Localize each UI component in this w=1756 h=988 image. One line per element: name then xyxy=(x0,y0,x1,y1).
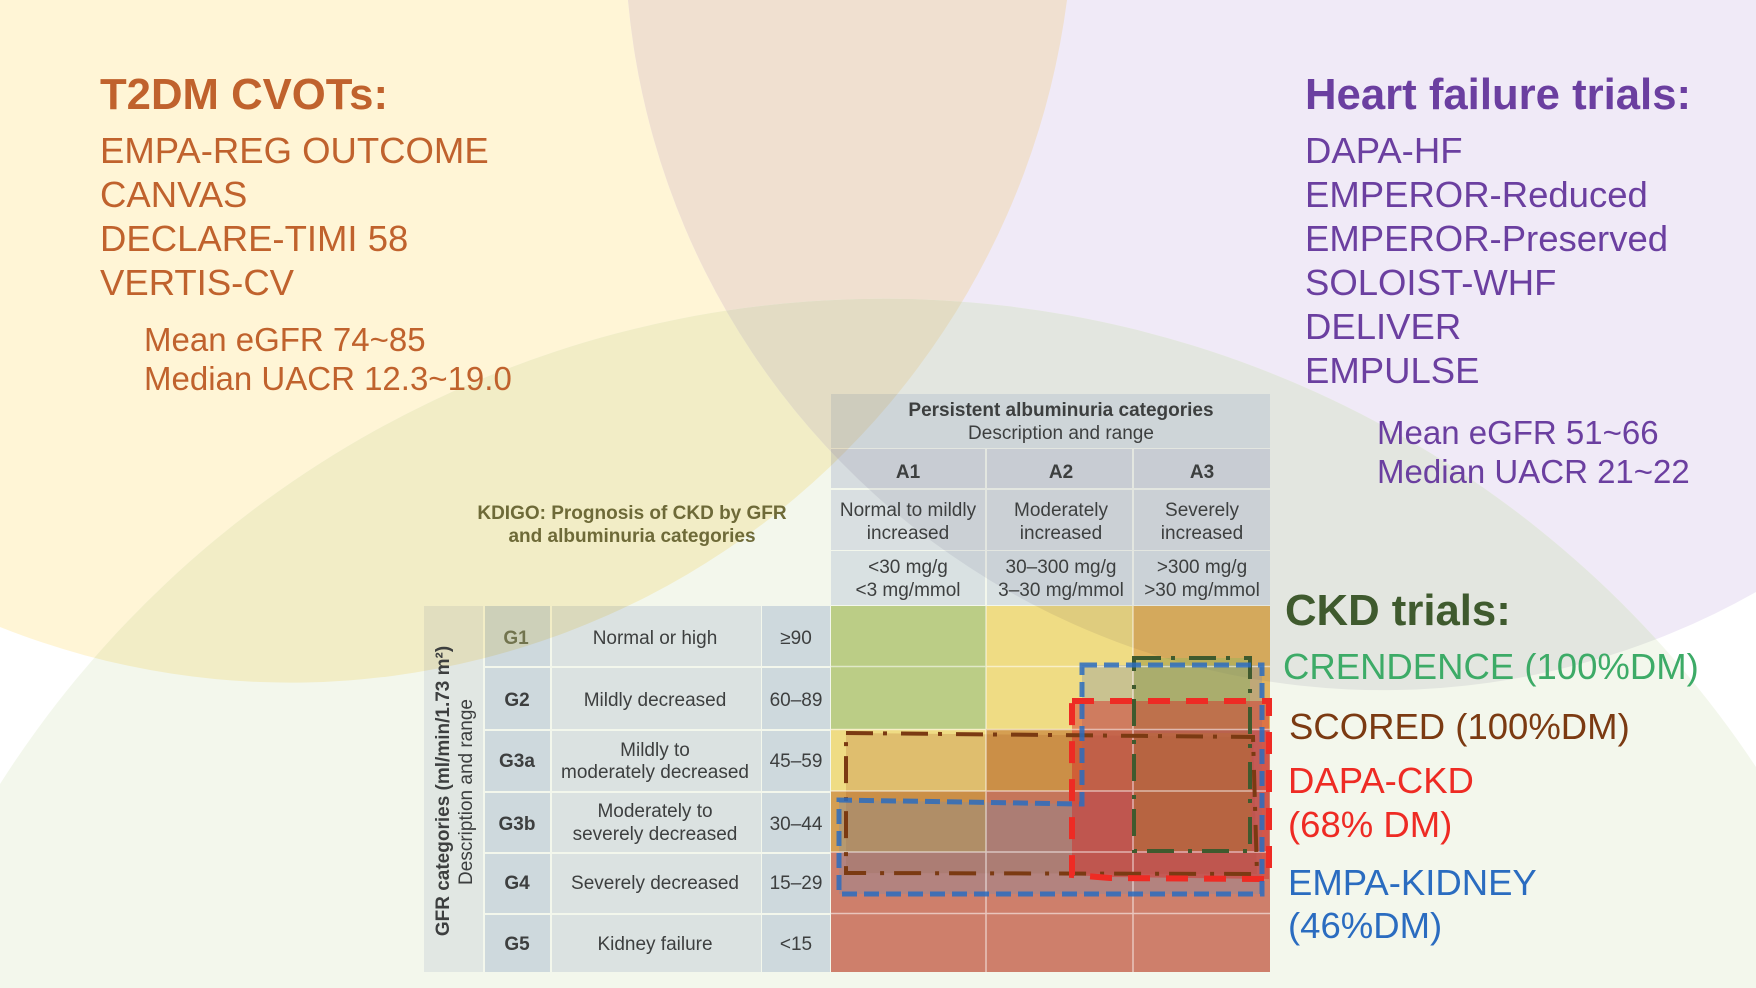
trial list: T2DM: CANVAS xyxy=(100,174,247,215)
trial list: T2DM: VERTIS-CV xyxy=(100,262,295,303)
table text: GFR rows: Kidney failure xyxy=(597,934,713,955)
table text: GFR rows: 30–44 xyxy=(770,814,823,835)
table text: albuminuria header: >300 mg/g xyxy=(1157,557,1247,578)
table text: GFR rows: severely decreased xyxy=(573,824,737,845)
trial list: T2DM xyxy=(100,130,489,303)
table text: GFR rows: 60–89 xyxy=(770,690,822,711)
table text: albuminuria header xyxy=(840,400,1260,601)
table text: albuminuria header: 3–30 mg/mmol xyxy=(998,580,1124,601)
heading: Heart failure trials: Heart failure trials: xyxy=(1305,70,1691,119)
dashed outline: EMPA-KIDNEY (blue) xyxy=(839,665,1262,894)
trial list: T2DM: EMPA-REG OUTCOME xyxy=(100,130,489,171)
trial list: heart failure xyxy=(1305,130,1668,391)
table text: GFR rows xyxy=(499,628,823,955)
table text: GFR rows: 15–29 xyxy=(770,873,822,894)
venn overlap: all three xyxy=(726,298,962,459)
panel: CKD trials xyxy=(1283,586,1699,946)
grid lines xyxy=(831,606,1270,972)
venn overlap: CKD and T2DM xyxy=(94,310,838,683)
table text: GFR rows: 45–59 xyxy=(770,751,822,772)
table header backgrounds xyxy=(831,394,1270,605)
table text: albuminuria header: A2 xyxy=(1049,462,1073,483)
table text: albuminuria header: <30 mg/g xyxy=(868,557,948,578)
table text: GFR rows: Mildly decreased xyxy=(584,690,726,711)
table text: GFR rows: G2 xyxy=(504,690,530,711)
table text: albuminuria header: <3 mg/mmol xyxy=(855,580,961,601)
table title: KDIGO: KDIGO: Prognosis of CKD by GFR xyxy=(477,503,787,524)
dashed outline: DAPA-CKD (red) xyxy=(1072,701,1269,879)
baseline stats: heart failure xyxy=(1377,414,1690,490)
heading: CKD trials: CKD trials: xyxy=(1285,586,1511,635)
table text: albuminuria header: A1 xyxy=(896,462,921,483)
table text: GFR rows: Mildly to xyxy=(620,740,690,761)
table text: GFR category axis labels: GFR categories (ml/min/1.73 m²) xyxy=(433,646,454,936)
table text: GFR rows: Severely decreased xyxy=(571,873,739,894)
table text: GFR rows: G4 xyxy=(504,873,530,894)
table text: albuminuria header: Severely xyxy=(1165,500,1239,521)
table text: GFR rows: G5 xyxy=(504,934,530,955)
table title: KDIGO: and albuminuria categories xyxy=(508,526,756,547)
table text: albuminuria header: increased xyxy=(1161,523,1243,544)
table text: GFR category axis labels: Description and range xyxy=(456,699,477,885)
dashed outline: SCORED (brown) xyxy=(846,733,1257,874)
venn overlap: T2DM and heart failure xyxy=(628,0,1067,310)
trial list: heart failure: EMPULSE xyxy=(1305,350,1479,391)
dashed outline: CREDENCE (dark green) xyxy=(1134,658,1250,851)
table text: GFR rows: Moderately to xyxy=(597,801,713,822)
trial list: heart failure: EMPEROR-Reduced xyxy=(1305,174,1648,215)
trial list: heart failure: DELIVER xyxy=(1305,306,1461,347)
panel: T2DM CVOTs xyxy=(100,70,512,397)
baseline stats: T2DM: Median UACR 12.3~19.0 xyxy=(144,360,512,397)
table text: albuminuria header: 30–300 mg/g xyxy=(1006,557,1116,578)
trial list: heart failure: EMPEROR-Preserved xyxy=(1305,218,1668,259)
baseline stats: heart failure: Mean eGFR 51~66 xyxy=(1377,414,1659,451)
venn overlap: CKD and heart failure xyxy=(838,302,1656,690)
trial coverage fills xyxy=(839,658,1269,894)
table text: albuminuria header: Normal to mildly xyxy=(840,500,977,521)
table title: KDIGO xyxy=(477,503,787,547)
heat map cells xyxy=(831,606,1270,972)
table text: GFR rows: G3b xyxy=(499,814,535,835)
table text: GFR rows: Normal or high xyxy=(593,628,717,649)
table text: albuminuria header: Moderately xyxy=(1014,500,1108,521)
table text: albuminuria header: A3 xyxy=(1190,462,1214,483)
legend: EMPA-KIDNEY: (46%DM) xyxy=(1288,905,1442,946)
baseline stats: T2DM: Mean eGFR 74~85 xyxy=(144,321,426,358)
legend: DAPA-CKD xyxy=(1288,760,1474,845)
table text: GFR rows: G3a xyxy=(499,751,535,772)
venn circle: CKD (green) xyxy=(0,299,1756,988)
table text: GFR rows: G1 xyxy=(503,628,529,649)
table text: albuminuria header: increased xyxy=(867,523,949,544)
table text: GFR rows: <15 xyxy=(780,934,812,955)
table text: GFR rows: moderately decreased xyxy=(561,762,749,783)
panel: Heart failure trials xyxy=(1305,70,1691,490)
table left column backgrounds xyxy=(424,606,830,972)
table text: albuminuria header: >30 mg/mmol xyxy=(1144,580,1260,601)
table text: GFR category axis labels xyxy=(433,646,477,936)
legend: EMPA-KIDNEY xyxy=(1288,862,1537,946)
table text: albuminuria header: Persistent albuminuria categories xyxy=(908,400,1214,421)
trial list: heart failure: SOLOIST-WHF xyxy=(1305,262,1556,303)
legend: CRENDENCE: CRENDENCE (100%DM) xyxy=(1283,646,1699,687)
legend: EMPA-KIDNEY: EMPA-KIDNEY xyxy=(1288,862,1537,903)
legend: DAPA-CKD: DAPA-CKD xyxy=(1288,760,1474,801)
trial list: heart failure: DAPA-HF xyxy=(1305,130,1462,171)
trial list: T2DM: DECLARE-TIMI 58 xyxy=(100,218,408,259)
table text: albuminuria header: increased xyxy=(1020,523,1102,544)
table text: albuminuria header: Description and range xyxy=(968,423,1154,444)
legend: DAPA-CKD: (68% DM) xyxy=(1288,804,1452,845)
venn circle: T2DM (yellow) xyxy=(0,0,1067,683)
baseline stats: T2DM xyxy=(144,321,512,397)
legend: SCORED: SCORED (100%DM) xyxy=(1289,706,1630,747)
venn circle: heart failure (purple) xyxy=(628,0,1756,690)
table text: GFR rows: ≥90 xyxy=(780,628,812,649)
baseline stats: heart failure: Median UACR 21~22 xyxy=(1377,453,1690,490)
panel: KDIGO heat map table xyxy=(424,394,1270,972)
heading: T2DM CVOTs: T2DM CVOTs: xyxy=(100,70,388,119)
